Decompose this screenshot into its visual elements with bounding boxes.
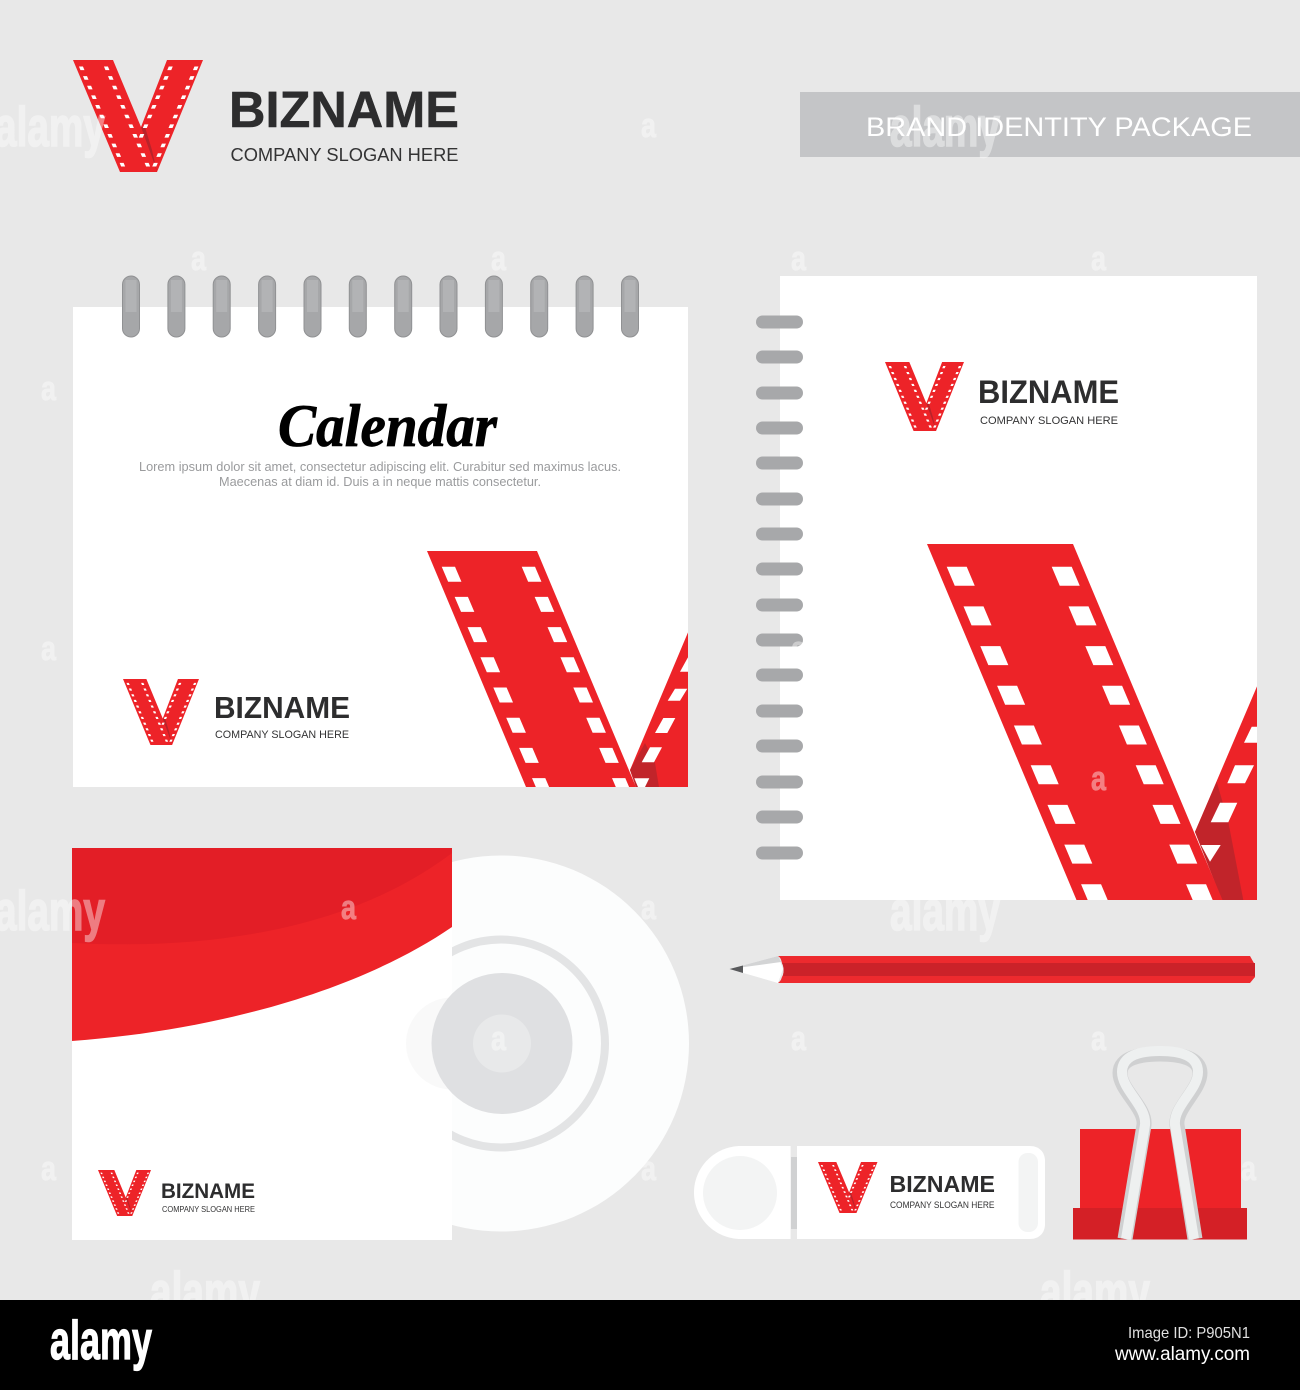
envelope logo: COMPANY SLOGAN HERE <box>162 1205 255 1214</box>
watermark: a <box>1091 1020 1107 1058</box>
icon: pencil <box>730 956 1255 983</box>
image id: Image ID: P905N1 <box>1128 1325 1250 1342</box>
USB logo <box>818 1162 995 1213</box>
watermark: a <box>791 240 807 278</box>
watermark: a <box>791 630 807 668</box>
CD ring <box>397 940 605 1148</box>
watermark: a <box>641 1150 657 1188</box>
CD centre disc <box>432 973 572 1114</box>
USB body <box>797 1146 1045 1239</box>
notebook page <box>780 276 1257 900</box>
clip wire <box>1120 1051 1200 1239</box>
calendar heading: Calendar <box>278 393 498 459</box>
watermark: a <box>641 889 657 927</box>
notebook logo: COMPANY SLOGAN HERE <box>980 415 1118 427</box>
watermark: a <box>191 240 207 278</box>
footer bar <box>0 1300 1300 1390</box>
notebook spiral rings <box>756 316 803 860</box>
clip body <box>1080 1129 1241 1208</box>
panel: notebook <box>756 276 1258 905</box>
watermark: a <box>491 1020 507 1058</box>
calendar page <box>73 307 688 787</box>
company slogan: COMPANY SLOGAN HERE <box>230 144 458 165</box>
USB joint <box>791 1157 797 1229</box>
USB slider slot <box>1018 1153 1038 1232</box>
icon: film strip V <box>73 60 203 172</box>
watermark: a <box>491 240 507 278</box>
USB cap <box>694 1146 791 1239</box>
footer brand: alamy <box>50 1309 152 1371</box>
notebook film strip graphic <box>927 544 1258 905</box>
envelope logo <box>98 1170 255 1216</box>
calendar body text: Lorem ipsum dolor sit amet, consectetur adipiscing elit. Curabitur sed maximus lacus. <box>139 460 621 474</box>
watermark: a <box>641 107 657 145</box>
watermark: a <box>341 889 357 927</box>
banner title: BRAND IDENTITY PACKAGE <box>866 112 1252 142</box>
calendar logo: BIZNAME <box>214 691 350 725</box>
icon: binder clip <box>1073 1051 1247 1240</box>
panel: calendar <box>73 276 689 790</box>
envelope red flap <box>72 848 452 1041</box>
envelope logo: BIZNAME <box>161 1179 255 1203</box>
USB logo: COMPANY SLOGAN HERE <box>890 1200 995 1210</box>
USB cap circle <box>703 1156 777 1230</box>
watermark: a <box>1091 760 1107 798</box>
watermark: a <box>41 1150 57 1188</box>
watermark: alamy <box>150 1260 260 1323</box>
header banner <box>800 92 1300 157</box>
calendar logo <box>123 679 350 745</box>
calendar logo: COMPANY SLOGAN HERE <box>215 729 349 741</box>
watermark: alamy <box>1040 1260 1150 1323</box>
website: www.alamy.com <box>1114 1344 1250 1365</box>
watermark: alamy <box>890 95 1000 158</box>
watermark: a <box>1241 1150 1257 1188</box>
watermark: a <box>1091 240 1107 278</box>
watermark: a <box>41 370 57 408</box>
CD disc <box>313 856 689 1232</box>
calendar film strip graphic <box>427 551 689 790</box>
calendar spiral rings <box>122 276 638 337</box>
panel: CD with envelope <box>72 848 689 1240</box>
watermark: alamy <box>890 879 1000 942</box>
header logo <box>73 60 459 172</box>
icon: USB drive <box>694 1146 1045 1239</box>
company name: BIZNAME <box>229 81 459 138</box>
notebook logo <box>885 362 1119 431</box>
watermark: a <box>791 1020 807 1058</box>
notebook logo: BIZNAME <box>978 374 1119 410</box>
CD centre hole <box>473 1014 531 1072</box>
USB logo: BIZNAME <box>890 1171 995 1197</box>
calendar body text: Maecenas at diam id. Duis a in neque mattis consectetur. <box>219 475 541 489</box>
CD hub shadow <box>406 998 498 1090</box>
envelope sheet <box>72 848 452 1240</box>
watermark: a <box>41 630 57 668</box>
clip base <box>1073 1208 1247 1240</box>
